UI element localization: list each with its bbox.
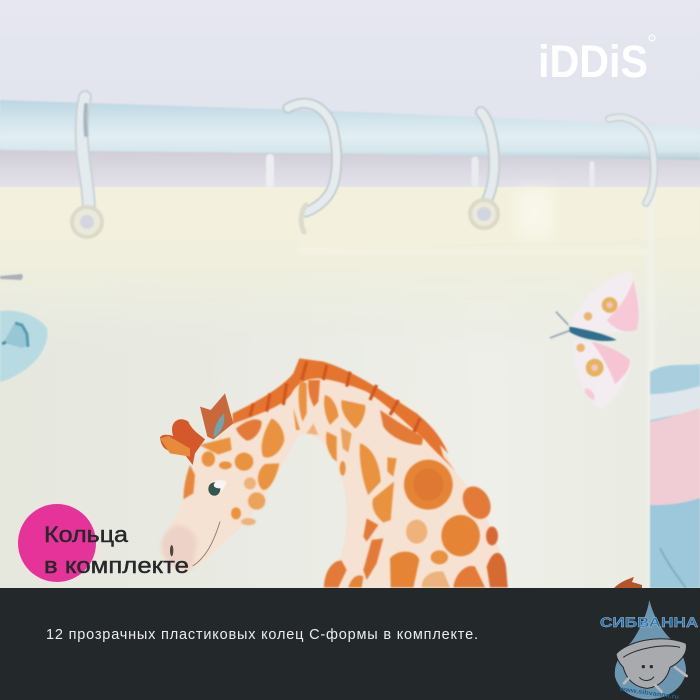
illustration: right side block [650, 364, 700, 588]
dark footer bar [0, 588, 700, 700]
illustration: butterfly [550, 271, 639, 410]
ring 4 [592, 117, 654, 203]
shadow band under the rod [0, 148, 700, 190]
giraffe eye [208, 480, 227, 496]
illustration: giraffe [160, 358, 508, 587]
background wall [0, 0, 700, 190]
giraffe ear [200, 393, 233, 439]
ring 2 [270, 103, 337, 232]
logo bathtub [616, 639, 686, 688]
brand logo: iDDiS [538, 36, 648, 87]
logo url: www.sibvanna.ru [618, 686, 680, 700]
curtain fabric [0, 187, 700, 588]
ring 3 [470, 112, 498, 228]
ring 1 [72, 97, 102, 237]
illustration: partial blue shape at left edge [0, 274, 47, 382]
giraffe nostril and mouth [170, 522, 220, 566]
logo face [624, 665, 687, 692]
curtain hem [0, 188, 700, 250]
giraffe horn [160, 419, 205, 465]
heading: rings included [44, 522, 189, 578]
giraffe body [161, 358, 508, 587]
heading: rings included: Кольца [44, 522, 129, 547]
illustration: small brown foot [614, 577, 642, 588]
logo water drop [615, 600, 686, 699]
retailer logo: Sibvanna [600, 600, 698, 700]
footer description: 12 прозрачных пластиковых колец С-формы в комплекте. [46, 627, 478, 643]
curtain rod [0, 100, 700, 160]
heading: rings included: в комплекте [44, 553, 189, 578]
giraffe mane [233, 358, 455, 471]
pink circle [18, 504, 96, 582]
logo wordmark: СИБВАННА [600, 614, 698, 630]
giraffe spots [183, 380, 508, 587]
giraffe snout shade [161, 525, 197, 571]
